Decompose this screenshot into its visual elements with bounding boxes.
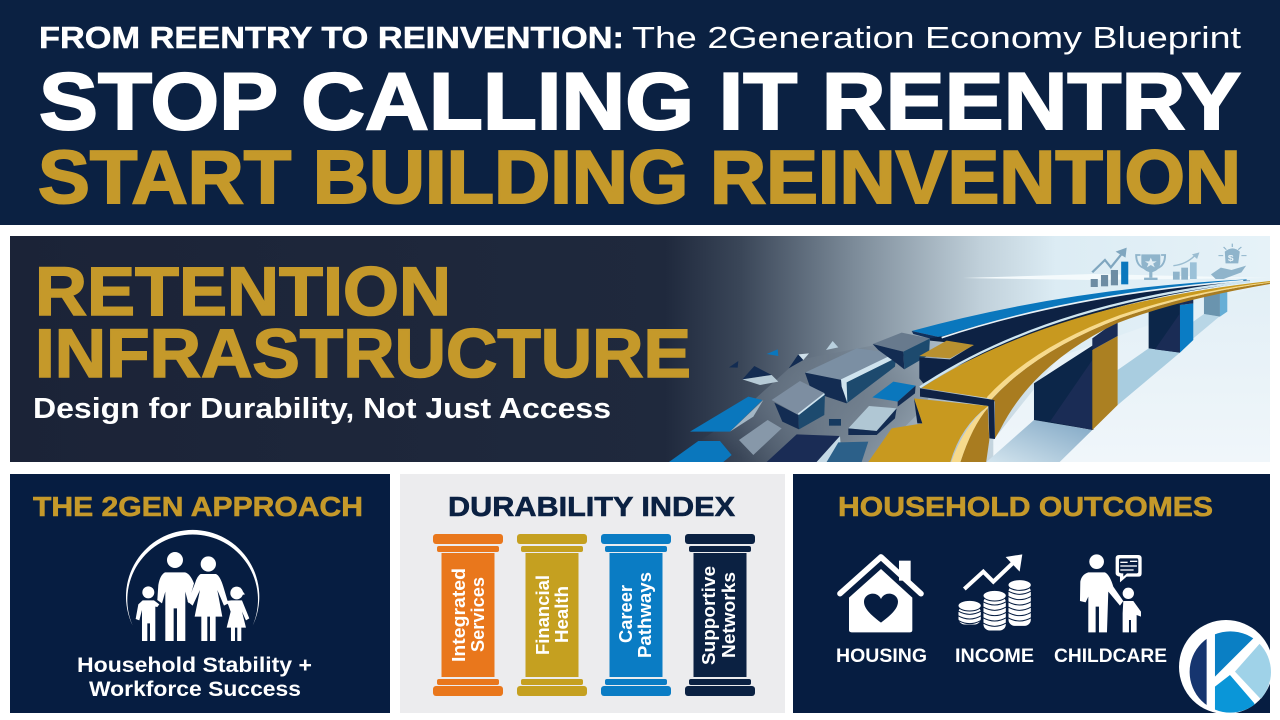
broken gold section [867,398,989,463]
caption: household stability and workforce success: Household Stability + [77,654,312,677]
label: housing: HOUSING [836,646,927,667]
icon: rising bar chart [1091,248,1128,287]
heading: durability index: DURABILITY INDEX [448,491,735,522]
header band [0,0,1280,225]
heading: the 2gen approach: THE 2GEN APPROACH [33,491,363,522]
banner tagline: Design for Durability, Not Just Access [33,393,611,425]
coin stacks [958,580,1031,631]
icon: hand holding money: $ [1228,254,1234,264]
pillar: supportive networks: Networks [719,572,739,658]
icon: hand holding money [1211,244,1247,279]
rubble fragments [665,333,942,463]
panel: retention infrastructure banner [10,236,1270,463]
icon: house with heart [840,557,921,632]
gold lane [920,281,1270,439]
pillar: integrated services: Services [468,577,488,652]
pillar: financial health: Financial [533,575,553,655]
pillar: career pathways: Pathways [635,572,655,658]
pillar: integrated services: Integrated [449,568,469,662]
caption: household stability and workforce success [77,654,312,701]
father [157,552,194,641]
pillar 1 [1034,320,1118,430]
pillar: financial health [517,534,587,696]
pillar 3 [1204,287,1227,317]
header kicker line: FROM REENTRY TO REINVENTION: [39,20,624,55]
icon: family under arc [126,530,259,641]
pillar: career pathways [601,534,671,696]
pillar: supportive networks [685,534,755,696]
header kicker line [39,20,1241,55]
icon: growth bars [1173,252,1199,280]
pillar: supportive networks: Supportive [699,566,719,665]
icon: trophy [1136,254,1165,280]
daughter [226,587,249,641]
blue lane [912,279,1247,339]
achievement icons [1091,244,1247,287]
header kicker line: The 2Generation Economy Blueprint [632,20,1241,55]
label: income: INCOME [955,646,1034,667]
pillar: integrated services [433,534,503,696]
label: childcare: CHILDCARE [1054,646,1167,667]
caption: household stability and workforce success: Workforce Success [89,678,301,701]
heading: retention infrastructure [35,253,691,392]
icon: coins with rising arrow [958,554,1031,631]
pillar: financial health: Health [552,586,572,643]
pillar 2 [1149,293,1193,353]
mother [188,556,228,641]
illustration: broken road becoming a bridge [665,244,1270,463]
panel: the 2gen approach [10,474,390,713]
gold subtitle: START BUILDING REINVENTION [38,135,1241,219]
heading: retention infrastructure: INFRASTRUCTURE [35,315,691,392]
son [136,586,159,641]
panel: durability index [400,474,785,713]
icon: adult and child with speech bubble [1080,554,1142,632]
navy lane [919,280,1250,387]
panel: household outcomes [793,474,1270,713]
main title: STOP CALLING IT REENTRY [39,57,1241,147]
floor shadows [985,314,1219,463]
bridge [867,279,1270,463]
heading: household outcomes: HOUSEHOLD OUTCOMES [838,491,1213,522]
heading: retention infrastructure: RETENTION [35,253,451,330]
logo: K mark [1179,620,1275,718]
pillar: career pathways: Career [616,585,636,643]
